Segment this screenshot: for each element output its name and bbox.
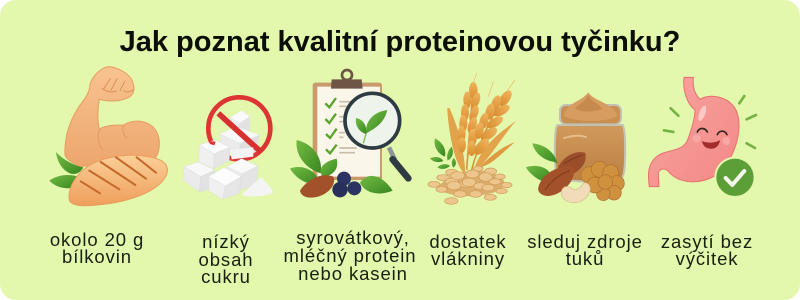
label: sugar: cukru — [201, 266, 251, 287]
label: protein source: mléčný protein — [284, 245, 416, 266]
icon: happy stomach with check badge — [648, 77, 756, 198]
label: sugar — [199, 231, 253, 287]
label: satiety — [661, 231, 753, 269]
icon: sugar cubes with prohibition sign — [184, 97, 273, 199]
icon: wheat ears and oat flakes — [428, 73, 517, 204]
label: protein source — [284, 227, 416, 284]
label: protein source: nebo kasein — [298, 263, 408, 284]
label: fats: tuků — [566, 248, 604, 269]
label: fats — [527, 231, 643, 269]
label: sugar: nízký — [202, 231, 250, 252]
label: fiber — [429, 231, 507, 269]
icon: clipboard with magnifier, almond and berries — [290, 70, 408, 198]
label: fiber: vlákniny — [431, 248, 505, 269]
label: sugar: obsah — [199, 249, 253, 270]
label: fiber: dostatek — [429, 231, 507, 252]
title: Jak poznat kvalitní proteinovou tyčinku? — [120, 26, 680, 58]
icon: flexed arm and chicken breast — [49, 67, 167, 206]
label: satiety: výčitek — [676, 248, 738, 269]
label: protein source: syrovátkový, — [296, 227, 410, 248]
label: protein: bílkovin — [62, 246, 132, 267]
label: fats: sleduj zdroje — [527, 231, 643, 252]
label: satiety: zasytí bez — [661, 231, 753, 252]
icon: nut butter jar with nuts — [526, 92, 625, 203]
label: protein — [50, 229, 144, 267]
label: protein: okolo 20 g — [50, 229, 144, 250]
